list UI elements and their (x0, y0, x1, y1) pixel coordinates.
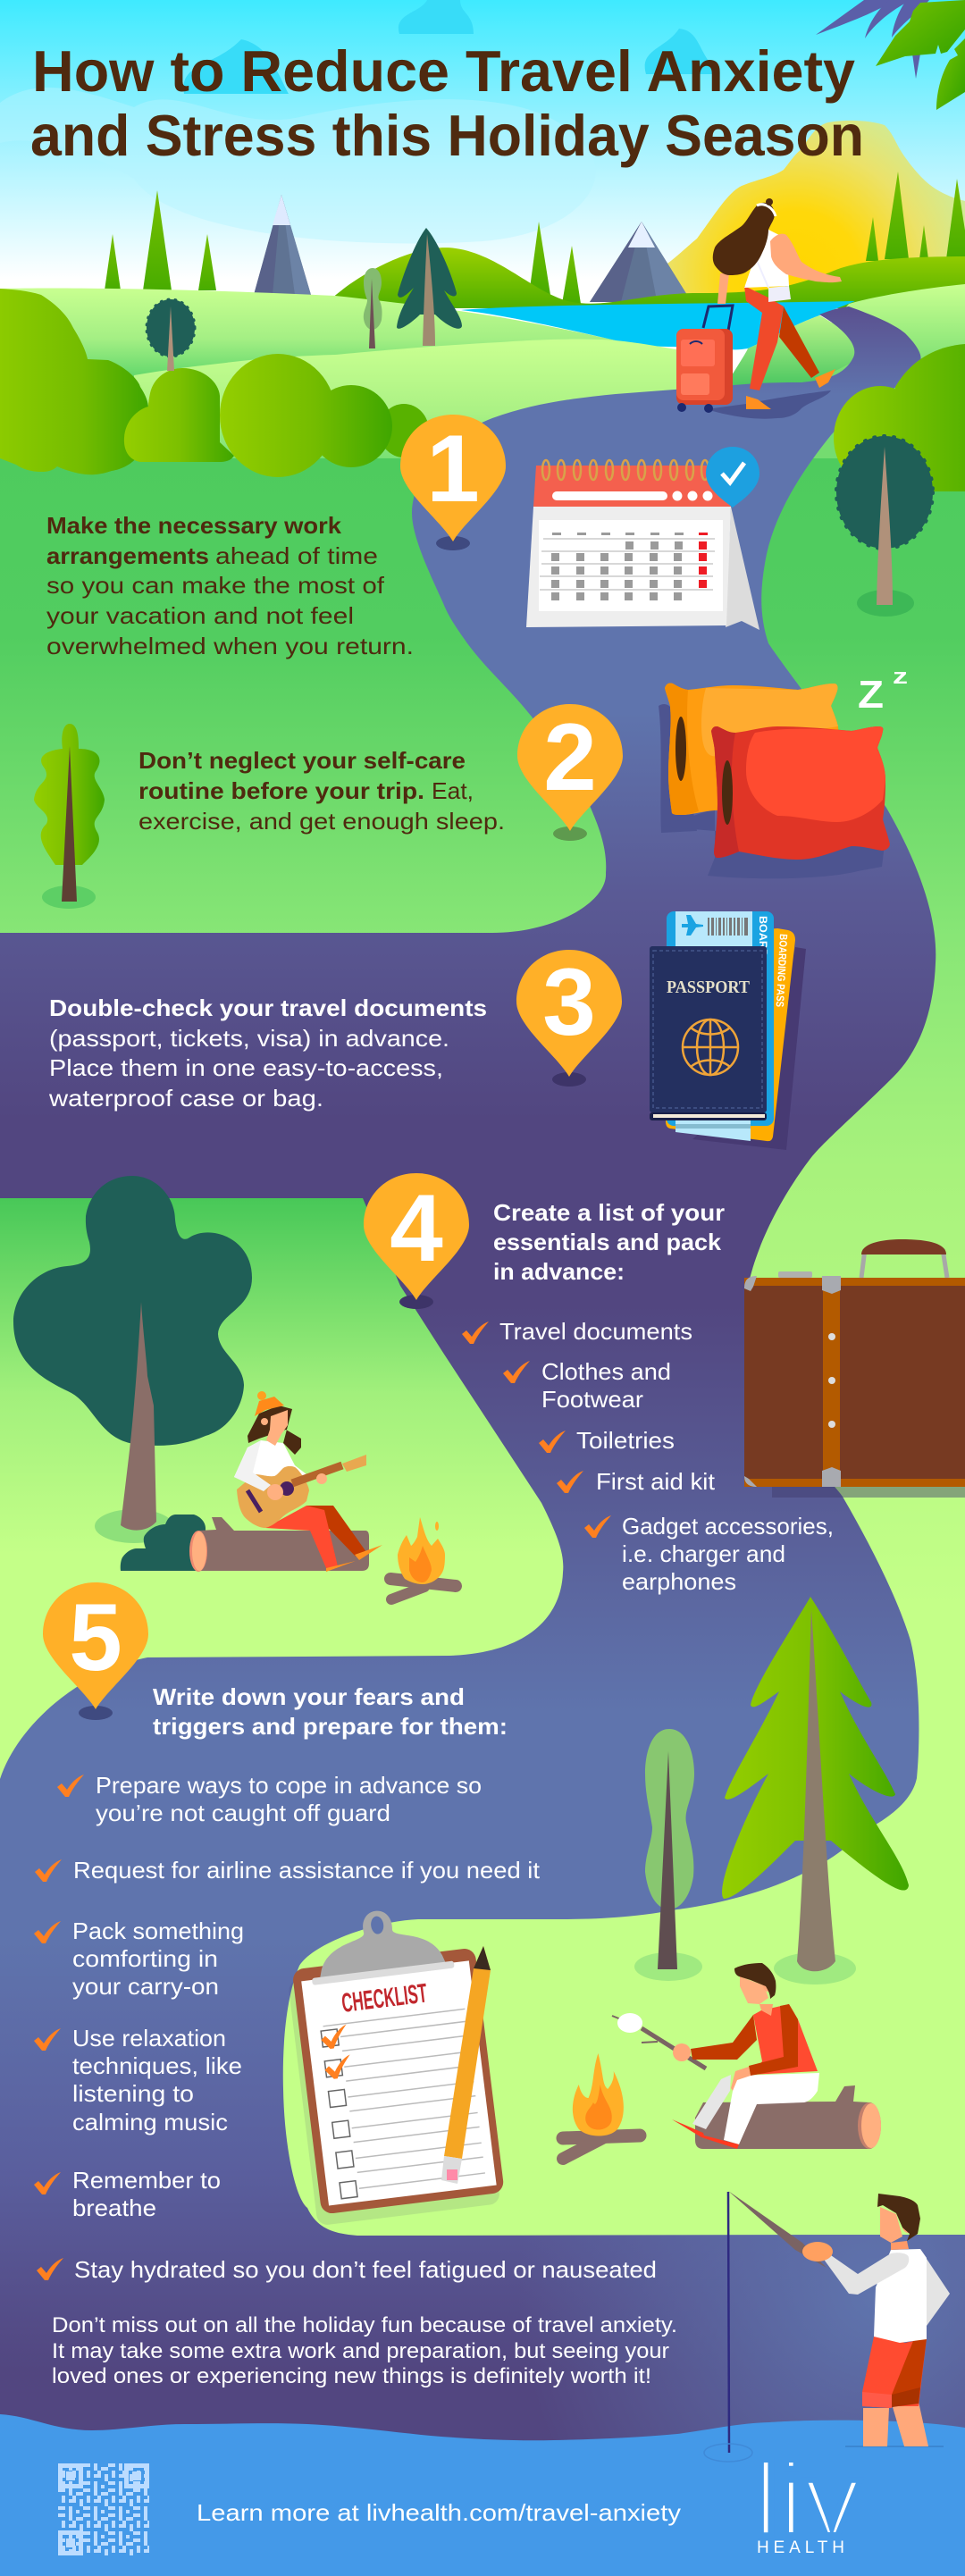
bag (755, 256, 768, 288)
step 2 text: Don’t neglect your self-care (138, 747, 466, 774)
red pillow (711, 726, 890, 860)
fir tree (397, 228, 462, 346)
sleep zz (858, 665, 908, 717)
date grid (551, 533, 684, 600)
clip (312, 1903, 447, 1982)
shadow (772, 1487, 965, 1498)
face (740, 1976, 768, 2004)
shoes (746, 396, 771, 409)
log (198, 1517, 369, 1571)
step 5 checklist: listening to (72, 2080, 194, 2107)
step 1 text: so you can make the most of (46, 572, 385, 599)
hair (877, 2194, 920, 2241)
globe emblem (683, 1019, 738, 1075)
orange pass (666, 928, 795, 1141)
shadow on road (706, 390, 831, 419)
white pants (724, 2073, 819, 2144)
step 1 text: overwhelmed when you return. (46, 633, 414, 659)
neck (759, 2004, 773, 2016)
fishing line (728, 2192, 729, 2453)
rings (542, 460, 709, 480)
water footer band (0, 2414, 965, 2576)
step 4 checklist: Clothes and (541, 1358, 671, 1385)
clipboard checklist (281, 1900, 506, 2226)
log (695, 2085, 869, 2149)
passport cover (650, 946, 767, 1112)
campfire right (563, 2053, 640, 2159)
ground gradient (0, 458, 965, 1977)
pin 4: 4 (390, 1174, 443, 1281)
pin 4 (364, 1173, 469, 1309)
step 4 checklist: Travel documents (499, 1318, 692, 1345)
Liv Health logo: HEALTH (757, 2538, 844, 2557)
step 5 checklist: calming music (72, 2109, 228, 2135)
barcode (708, 918, 748, 936)
step 4 checklist: Gadget accessories, (622, 1513, 834, 1540)
far meadow hill (0, 288, 715, 465)
pin 1: 1 (426, 415, 480, 522)
yellow sunlit hill (661, 121, 965, 299)
back leg (692, 2075, 731, 2129)
front arm (691, 2015, 757, 2060)
step 5 checklist: Request for airline assistance if you need it (73, 1857, 541, 1884)
lower-left meadow (0, 1198, 563, 1779)
man roasting marshmallow on log (612, 1963, 881, 2149)
step 5 checklist: Use relaxation (72, 2025, 226, 2052)
step 5 checklist: Prepare ways to cope in advance so (96, 1772, 482, 1799)
hands (267, 1484, 283, 1500)
guitar body (237, 1466, 309, 1528)
rows (323, 2009, 485, 2190)
pencil (441, 1946, 491, 2184)
calendar illustration (526, 447, 759, 630)
sleeve (749, 2004, 798, 2076)
torso (874, 2249, 927, 2343)
hair (713, 203, 775, 275)
pillows illustration (659, 684, 890, 878)
step 4 heading: Create a list of your (493, 1199, 725, 1226)
traveler with suitcase (676, 198, 842, 419)
step 1 text: Make the necessary work (46, 512, 342, 539)
step 4 checklist (462, 1318, 834, 1595)
tree right of road (836, 436, 933, 617)
clouds (0, 0, 720, 243)
neck (891, 2241, 909, 2250)
title: and Stress this Holiday Season (30, 103, 864, 168)
step 3 text: Double-check your travel documents (49, 994, 487, 1021)
mountains (254, 195, 690, 302)
step 4 heading: in advance: (493, 1258, 625, 1285)
back arm (717, 273, 729, 304)
step 5 heading: triggers and prepare for them: (153, 1713, 508, 1740)
pin 1 (400, 415, 506, 550)
closing paragraph: It may take some extra work and preparation, but seeing your (52, 2339, 669, 2363)
back leg (779, 306, 819, 378)
green background hills (331, 248, 965, 308)
board (292, 1947, 505, 2215)
title: How to Reduce Travel Anxiety (32, 38, 855, 104)
step 4 checklist: earphones (622, 1568, 736, 1595)
legs (863, 2402, 928, 2446)
learn more link text: Learn more at livhealth.com/travel-anxiety (197, 2499, 681, 2526)
step 4 heading (493, 1199, 725, 1285)
step 5 checklist: Stay hydrated so you don’t feel fatigued or nauseated (74, 2256, 657, 2283)
passport and boarding passes: PASSPORT (667, 978, 751, 997)
sound hole and bridge (280, 1481, 294, 1496)
shirt (744, 230, 789, 288)
large dark tree (13, 1176, 252, 1543)
back arm (927, 2259, 950, 2326)
heading: CHECKLIST (340, 1978, 429, 2018)
sleep zz: Z (858, 673, 884, 717)
title (30, 38, 864, 168)
front leg (265, 1506, 338, 1568)
rod (728, 2191, 827, 2268)
step 1 text: ahead of time (215, 542, 378, 569)
arm (770, 234, 842, 282)
step 5 heading (153, 1683, 508, 1740)
sleep zz: z (893, 665, 908, 689)
lake (461, 301, 855, 349)
step 5 checklist: comforting in (72, 1945, 218, 1972)
handle (861, 1249, 947, 1278)
back leg (306, 1506, 366, 1557)
water shadow (845, 2446, 944, 2447)
passport and boarding passes (650, 911, 806, 1150)
big green fir tree (722, 1597, 909, 1984)
step 5 checklist: techniques, like (72, 2052, 242, 2079)
front arm (825, 2253, 909, 2295)
sleeve (234, 1440, 271, 1491)
step 5 checklist: you’re not caught off guard (96, 1800, 390, 1826)
step 5 checklist: your carry-on (72, 1973, 219, 2000)
poplar tree (634, 1729, 702, 1981)
fisherman (704, 2191, 950, 2462)
meadow patch between lake and road (726, 315, 855, 388)
clamps (744, 1276, 841, 1487)
step 4 checklist: Footwear (541, 1386, 643, 1413)
suitcase illustration (744, 1239, 965, 1498)
face (880, 2207, 902, 2243)
step 3 text: Place them in one easy-to-access, (49, 1054, 443, 1081)
stick and marshmallow (612, 2016, 625, 2021)
pin 2: 2 (543, 703, 597, 810)
face (266, 1410, 288, 1446)
pin 3: 3 (542, 948, 596, 1055)
hair (734, 1963, 776, 1999)
torso (751, 2004, 818, 2075)
distant cone trees (105, 172, 965, 304)
right bushes (834, 344, 965, 491)
dark shrub (121, 1515, 206, 1571)
step 5 checklist (34, 1772, 657, 2283)
shadows (659, 704, 697, 833)
step 5 checklist: breathe (72, 2194, 156, 2221)
closing paragraph: Don’t miss out on all the holiday fun because of travel anxiety. (52, 2313, 677, 2337)
front leg (744, 286, 784, 390)
plane icon (682, 915, 703, 936)
guitar neck (292, 1465, 342, 1483)
girl with guitar on log (189, 1391, 382, 1572)
blue pass (667, 911, 774, 1126)
closing paragraph: loved ones or experiencing new things is definitely worth it! (52, 2364, 651, 2388)
step 4 checklist: First aid kit (596, 1468, 716, 1495)
shorts (862, 2337, 927, 2408)
small round tree (147, 299, 195, 371)
hair (248, 1405, 301, 1455)
step 1 text: arrangements (46, 542, 209, 569)
poplar tree distant (364, 268, 382, 348)
pin 5 (43, 1582, 148, 1720)
pass label: BOARD (757, 916, 769, 957)
torso (234, 1440, 306, 1492)
pin 2 (517, 703, 623, 841)
back stand (726, 507, 759, 630)
passport and boarding passes: BOARDING PASS (774, 934, 790, 1007)
step 5 checklist: Pack something (72, 1917, 244, 1944)
oak tree left (34, 724, 105, 909)
QR code (58, 2463, 149, 2555)
step 2 text (138, 747, 505, 835)
near meadow hill (134, 340, 726, 465)
pin 3 (516, 948, 622, 1087)
campfire left (390, 1517, 456, 1599)
shoes (326, 1545, 382, 1572)
step 1 text: your vacation and not feel (46, 602, 354, 629)
body (744, 1278, 965, 1487)
step 5 checklist: Remember to (72, 2167, 221, 2194)
step 4 heading: essentials and pack (493, 1229, 722, 1255)
step 3 text: (passport, tickets, visa) in advance. (49, 1025, 449, 1052)
shadow (692, 947, 806, 1150)
closing paragraph (52, 2313, 677, 2388)
step 4 checklist: Toiletries (576, 1427, 675, 1454)
suitcase (703, 306, 733, 331)
step 5 heading: Write down your fears and (153, 1683, 465, 1710)
palm leaves (816, 0, 965, 110)
page (526, 507, 731, 627)
paper (301, 1960, 497, 2206)
step 1 text (46, 512, 414, 659)
step 2 text: exercise, and get enough sleep. (138, 808, 505, 835)
sky background (0, 0, 965, 304)
pin 5: 5 (69, 1583, 122, 1691)
step 3 text: waterproof case or bag. (48, 1085, 323, 1112)
shoes (672, 2119, 739, 2149)
bush cluster left (0, 289, 429, 477)
step 3 text (48, 994, 487, 1112)
step 2 text: routine before your trip. (138, 777, 424, 804)
blue check badge (706, 447, 759, 508)
meadow right of road (777, 284, 965, 482)
red header (533, 466, 733, 507)
step 4 checklist: i.e. charger and (622, 1540, 785, 1567)
orange pillow (665, 684, 844, 815)
hat (255, 1397, 284, 1416)
step 2 text: Eat, (432, 777, 474, 804)
knee hand (731, 2067, 751, 2091)
Liv Health logo: liv (753, 2441, 860, 2557)
